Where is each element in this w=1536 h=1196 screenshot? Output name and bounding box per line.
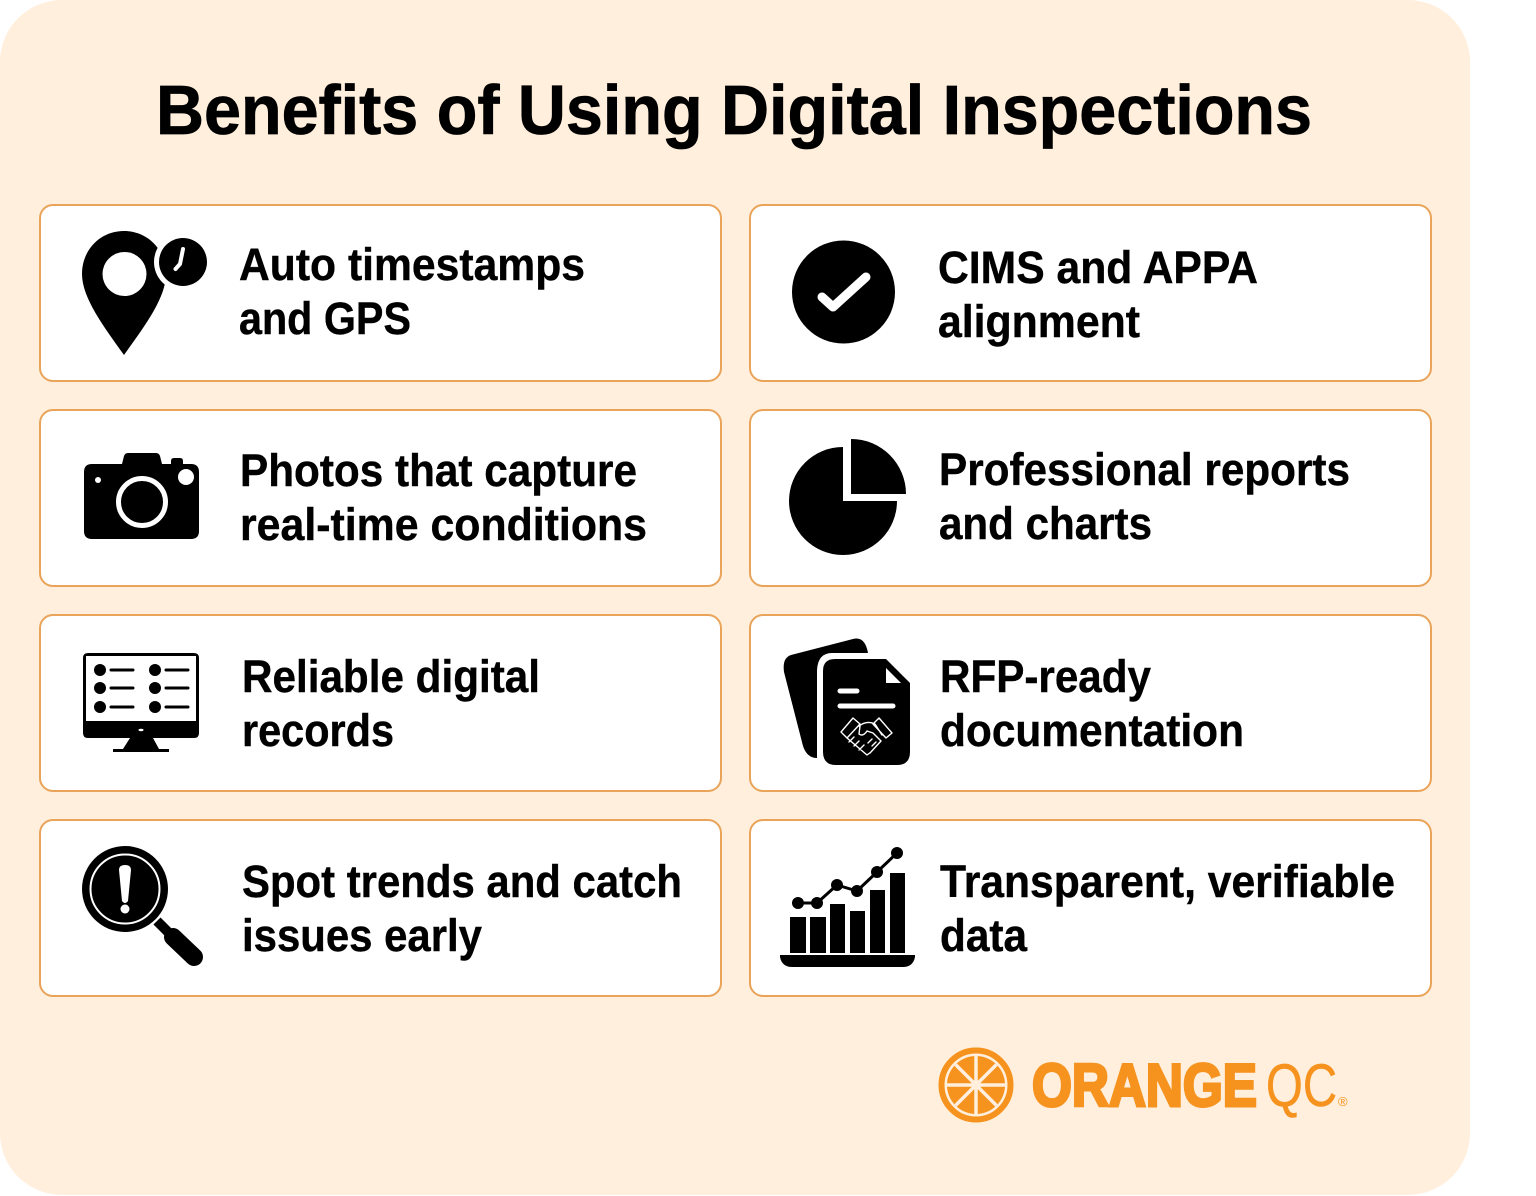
card text: real-time conditions — [240, 499, 647, 550]
icon: documents with handshake — [784, 639, 910, 765]
card text: and charts — [939, 498, 1152, 549]
card text: Auto timestamps — [239, 239, 585, 290]
card: photos — [40, 410, 721, 586]
card text — [239, 239, 585, 344]
card text — [242, 856, 682, 961]
card text: Reliable digital — [242, 651, 540, 702]
card text — [938, 242, 1258, 347]
icon: camera — [84, 453, 199, 539]
card text: RFP-ready — [940, 651, 1151, 702]
card: reliable digital records — [40, 615, 721, 791]
card text: records — [242, 705, 394, 756]
card text: alignment — [938, 296, 1140, 347]
card text: CIMS and APPA — [938, 242, 1258, 293]
logo wordmark: ORANGE — [1032, 1052, 1257, 1119]
icon: pie chart — [789, 439, 906, 555]
card: auto timestamps and GPS — [40, 205, 721, 381]
card text — [940, 856, 1395, 961]
card text: documentation — [940, 705, 1244, 756]
icon: monitor with list — [83, 653, 199, 752]
card text — [939, 444, 1350, 549]
card text — [940, 651, 1244, 756]
card text — [242, 651, 540, 756]
icon: growth bar chart — [780, 847, 915, 967]
card: professional reports — [750, 410, 1431, 586]
card text: Photos that capture — [240, 445, 637, 496]
card text — [240, 445, 647, 550]
card text: Transparent, verifiable — [940, 856, 1395, 907]
logo wordmark: ® — [1338, 1094, 1348, 1109]
card text: and GPS — [239, 293, 411, 344]
card text: data — [940, 910, 1028, 961]
icon: check mark circle — [792, 240, 895, 344]
card: spot trends — [40, 820, 721, 996]
card text: Professional reports — [939, 444, 1350, 495]
card text: Spot trends and catch — [242, 856, 682, 907]
card: RFP-ready documentation — [750, 615, 1431, 791]
card: CIMS and APPA alignment — [750, 205, 1431, 381]
card: transparent data — [750, 820, 1431, 996]
icon: orange slice — [942, 1050, 1010, 1120]
card text: issues early — [242, 910, 482, 961]
icon: magnifier with exclamation — [82, 846, 194, 957]
logo: OrangeQC — [942, 1050, 1348, 1120]
title: Benefits of Using Digital Inspections — [156, 71, 1312, 149]
logo wordmark: QC — [1266, 1052, 1337, 1119]
icon: location pin with clock — [82, 231, 212, 355]
